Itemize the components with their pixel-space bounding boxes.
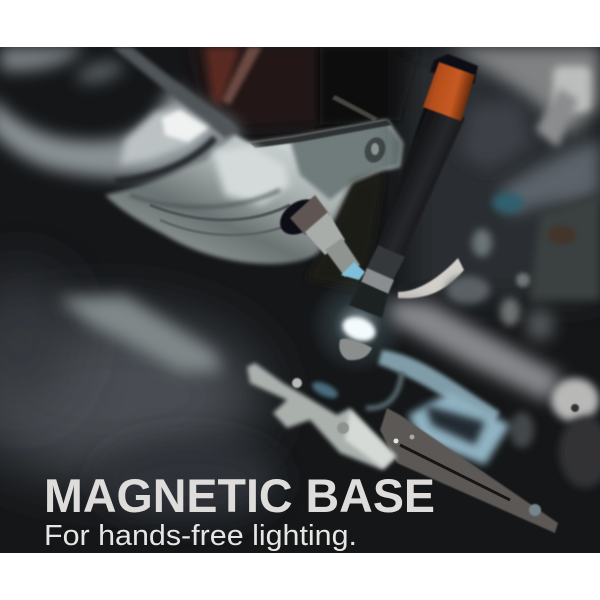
metal bracket: [247, 363, 558, 533]
bracket bright left plate: [247, 363, 397, 470]
blurred exhaust pipe top left: [0, 47, 240, 178]
subtitle: For hands-free lighting.: [44, 520, 357, 552]
bottom white band: [0, 553, 600, 600]
flashlight lit lens: [339, 313, 379, 345]
flashlight neck: [366, 245, 405, 282]
dark cavity behind sensor: [305, 172, 385, 290]
blurred engine parts right: [398, 47, 600, 304]
flashlight orange band: [423, 62, 475, 121]
bracket slot: [400, 445, 510, 500]
title: MAGNETIC BASE: [44, 469, 435, 522]
flashlight tail cap: [430, 54, 478, 84]
flashlight collar: [361, 268, 394, 294]
bracket rivets: [337, 422, 349, 434]
blurred bars lower right: [310, 298, 600, 488]
flashlight body: [378, 105, 465, 256]
blurred light streak mid left: [58, 295, 222, 372]
top white band: [0, 0, 600, 47]
metal flange and pipe: [105, 107, 403, 264]
light glow: [314, 282, 400, 368]
bracket blade: [380, 408, 558, 533]
flashlight: [308, 54, 478, 375]
rusty background top middle: [196, 47, 403, 127]
oxygen sensor: [290, 195, 365, 280]
flashlight head: [349, 282, 388, 318]
blurred dark area bottom left: [0, 270, 280, 520]
flashlight bottom magnet: [339, 339, 372, 360]
